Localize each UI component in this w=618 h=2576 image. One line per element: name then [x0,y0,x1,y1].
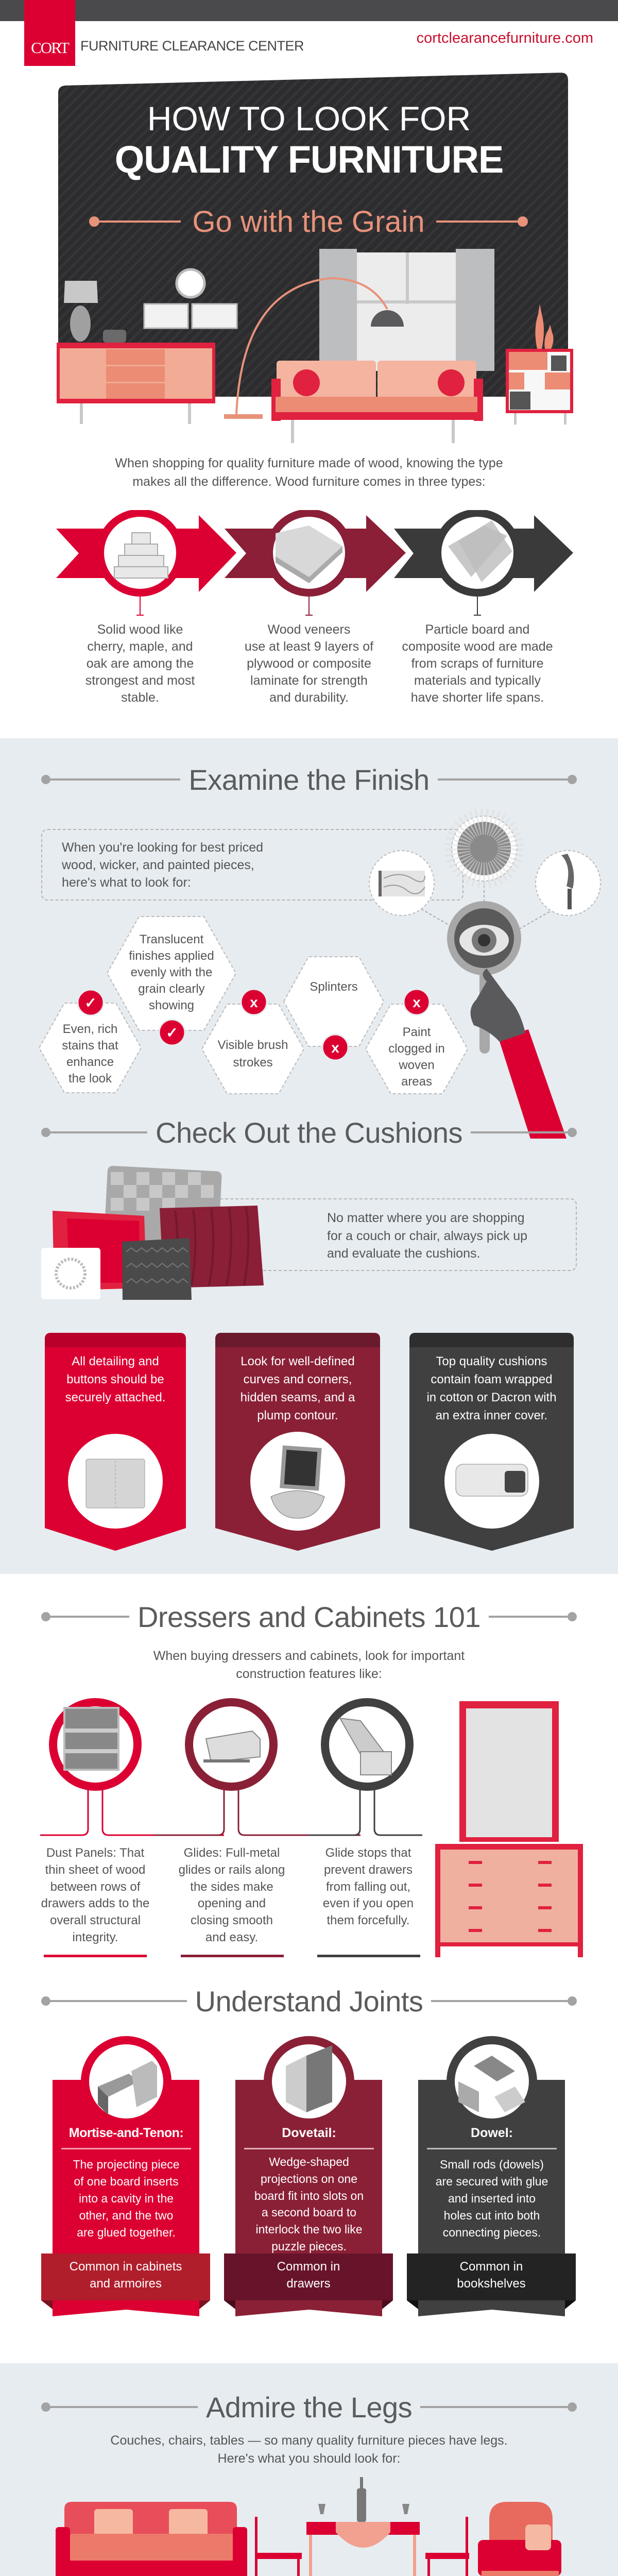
hexagon: paint clogged: clogged in [388,1042,445,1056]
joint: dovetail: Wedge-shaped [269,2155,349,2168]
joint: mortise and tenon: are glued together. [77,2226,176,2239]
text: glide stops: from falling out, [326,1880,410,1894]
hexagon: paint clogged: areas [401,1075,432,1089]
card: top quality cushions: contain foam wrapped [431,1372,553,1386]
dashed intro box [41,829,464,901]
logo: CORT [24,0,75,66]
legs intro text [110,2433,508,2466]
heading: Admire the Legs [41,2391,577,2424]
joint: dovetail: puzzle pieces. [271,2240,347,2253]
heading: Understand Joints: Understand Joints [195,1985,423,2018]
hero title bold: QUALITY FURNITURE [115,138,503,181]
card: detailing and buttons [45,1333,186,1551]
hexagon: translucent finishes [107,916,236,1031]
heading: Examine the Finish: Examine the Finish [188,764,430,795]
text: glides: opening and [198,1896,266,1910]
legs intro text: Couches, chairs, tables — so many quality furniture pieces have legs. [110,2433,508,2448]
text: veneers: plywood or composite [247,656,371,671]
dressers intro text [153,1649,465,1681]
joint: mortise and tenon: into a cavity in the [79,2192,174,2205]
hexagon: paint clogged: woven [399,1058,435,1072]
badges: check and x marks: x [250,994,258,1010]
icon: dust panels [40,1702,224,1835]
finish intro text: When you're looking for best priced [62,840,263,855]
card: detailing and buttons: securely attached. [65,1391,165,1404]
text: particle board: from scraps of furniture [411,656,544,671]
joint: mortise and tenon [41,2036,210,2316]
heading: Understand Joints [41,1985,577,2018]
hexagon: visible brush strokes [201,1004,304,1094]
text: solid wood: oak are among the [87,656,194,671]
card: well-defined curves [215,1333,380,1551]
text: glides [179,1846,285,1944]
text: dust panels: overall structural [50,1913,141,1927]
hexagon: even rich stains [39,1003,142,1093]
joint: dovetail: drawers [286,2277,331,2291]
icon: magnifying glass with eye [447,901,521,1054]
gray section background [0,738,618,1574]
joint: mortise and tenon: of one board inserts [74,2175,179,2188]
icon: wood grain [369,851,434,916]
joint: dovetail: board fit into slots on [254,2189,364,2202]
joint: dovetail: projections on one [261,2172,357,2185]
heading: Check Out the Cushions [41,1116,577,1149]
finish intro text: wood, wicker, and painted pieces, [62,858,254,872]
icon: glide stops [309,1702,422,1835]
joint: mortise and tenon: The projecting piece [73,2158,180,2171]
text: solid wood: Solid wood like [97,622,183,637]
arrow 3 particle board [394,509,573,615]
card: top quality cushions: an extra inner cover. [436,1409,547,1422]
finish intro text [62,840,263,890]
hexagon: translucent finishes: showing [149,998,194,1012]
joint: dowel: Dowel: [471,2126,513,2140]
logo: CORT: CORT [31,39,68,57]
text: glides: closing smooth [191,1913,273,1927]
joint: mortise and tenon: and armoires [90,2277,162,2291]
text: solid wood: cherry, maple, and [87,639,193,654]
intro text: wood types: When shopping for quality furniture made of wood, knowing the type [115,456,503,470]
text: particle board: composite wood are made [402,639,553,654]
heading: Dressers and Cabinets 101: Dressers and Cabinets 101 [138,1600,480,1633]
text: glide stops [323,1846,414,1927]
hexagon: visible brush strokes: strokes [233,1056,273,1070]
joint: dowel: connecting pieces. [443,2226,541,2239]
text: dust panels [41,1846,149,1944]
card: well-defined curves: plump contour. [257,1409,338,1422]
text: dust panels: drawers adds to the [41,1896,149,1910]
finish intro text: here's what to look for: [62,875,191,890]
heading: Admire the Legs: Admire the Legs [206,2391,412,2424]
heading: Examine the Finish [41,764,577,795]
text: dust panels: between rows of [50,1880,140,1894]
joint: dowel [407,2036,576,2316]
badges: check and x marks: ✓ [84,995,97,1011]
joint: dowel: are secured with glue [436,2175,548,2188]
text: dust panels: Dust Panels: That [46,1846,144,1860]
joint: mortise and tenon: Common in cabinets [70,2260,182,2274]
text: solid wood [85,622,195,705]
dresser with mirror illustration [435,1701,583,1957]
card: top quality cushions: in cotton or Dacron with [426,1391,557,1404]
arrow 2 veneer [225,509,406,615]
text: glides: glides or rails along [179,1863,285,1877]
cushions text: No matter where you are shopping [327,1211,525,1225]
joint: dovetail: a second board to [262,2206,356,2219]
text: solid wood: stable. [121,690,159,705]
joint: mortise and tenon: other, and the two [79,2209,173,2222]
text: dust panels: integrity. [73,1930,118,1944]
card: top quality cushions: Top quality cushions [436,1354,547,1368]
dressers intro text: When buying dressers and cabinets, look for important [153,1649,465,1663]
subtitle: Go with the Grain [89,205,528,238]
text: solid wood: strongest and most [85,673,195,688]
card: well-defined curves: hidden seams, and a [241,1391,355,1404]
joint: dowel: Small rods (dowels) [440,2158,544,2171]
dressers intro text: construction features like: [236,1667,382,1681]
card: well-defined curves: Look for well-defined [241,1354,355,1368]
text: veneers: Wood veneers [268,622,350,637]
badges: check and x marks: x [331,1040,339,1056]
hexagon: even rich stains: the look [68,1072,112,1086]
dashed cushions box [214,1198,577,1271]
brand name: FURNITURE CLEARANCE CENTER [80,38,304,54]
text: glide stops: even if you open [323,1896,414,1910]
text: particle board [402,622,553,705]
hero panel with furniture illustration [57,73,573,443]
text: glide stops: prevent drawers [324,1863,413,1877]
hand and red arm [471,969,566,1139]
feature circles with stems [40,1698,422,1836]
subtitle: Go with the Grain: Go with the Grain [192,205,425,238]
joint: dovetail: Dovetail: [282,2126,336,2140]
gray section background legs/stability [0,2363,618,2576]
text: particle board: materials and typically [414,673,541,688]
text: veneers: and durability. [269,690,349,705]
joint: dovetail: Common in [277,2260,340,2274]
intro text: wood types: makes all the difference. Wood furniture comes in three types: [132,474,486,489]
hero title: HOW TO LOOK FOR [147,99,471,138]
joint: dovetail [224,2036,393,2316]
text: veneers: laminate for strength [250,673,368,688]
text: veneers: use at least 9 layers of [245,639,373,654]
text: glide stops: them forcefully. [327,1913,409,1927]
joint: dowel: Common in [460,2260,523,2274]
text: veneers [245,622,374,705]
heading: Dressers and Cabinets 101 [41,1600,577,1633]
badges: check and x marks [77,990,431,1059]
icon: wicker [452,816,517,881]
hexagon: translucent finishes: finishes applied [129,949,214,963]
icon: paint brush [536,851,600,916]
magnifier illustration [369,809,601,1139]
arrow 1 solid wood [56,509,236,615]
heading: Check Out the Cushions: Check Out the Cushions [156,1116,462,1149]
joint: dowel: and inserted into [448,2192,536,2205]
intro text: wood types [115,456,503,489]
legs intro text: Here's what you should look for: [218,2451,400,2466]
text: glides: the sides make [190,1880,273,1894]
badges: check and x marks: x [413,994,421,1010]
top bar [0,0,618,21]
joint: dovetail: interlock the two like [255,2223,363,2236]
text: glides: and easy. [205,1930,258,1944]
hexagon: paint clogged: Paint [403,1025,431,1039]
arrows: three wood types [56,510,573,616]
hexagon: translucent finishes: Translucent [140,933,203,946]
card: detailing and buttons: All detailing and [72,1354,159,1368]
card: well-defined curves: curves and corners, [244,1372,352,1386]
icon: glides [154,1702,360,1835]
text: dust panels: thin sheet of wood [45,1863,145,1877]
hexagon: visible brush strokes: Visible brush [218,1038,288,1052]
text: glides: Glides: Full-metal [184,1846,280,1860]
hexagon: translucent finishes: grain clearly [138,982,205,996]
hexagon: translucent finishes: evenly with the [131,965,212,979]
website url header: cortclearancefurniture.com [417,30,593,46]
hexagon: splinters [283,956,384,1047]
underline bars [44,1955,147,1957]
card: top quality cushions [409,1333,574,1551]
cushions text: for a couch or chair, always pick up [327,1228,527,1243]
card: detailing and buttons: buttons should be [66,1372,164,1386]
hexagon: even rich stains: stains that [62,1039,118,1053]
cushions text: and evaluate the cushions. [327,1246,480,1261]
joint: dowel: bookshelves [457,2277,526,2291]
hexagon: paint clogged [365,1004,468,1094]
text: glide stops: Glide stops that [325,1846,411,1860]
hexagon: even rich stains: Even, rich [63,1022,117,1036]
hexagon: even rich stains: enhance [66,1055,114,1069]
joint: mortise and tenon: Mortise-and-Tenon: [69,2126,183,2140]
legs furniture illustration [56,2477,561,2576]
pillows illustration [41,1165,264,1300]
joint: dowel: holes cut into both [444,2209,540,2222]
badges: check and x marks: ✓ [166,1025,178,1041]
cushions text [327,1211,527,1261]
hexagon: splinters: Splinters [310,980,358,994]
text: particle board: Particle board and [425,622,529,637]
text: particle board: have shorter life spans. [411,690,544,705]
